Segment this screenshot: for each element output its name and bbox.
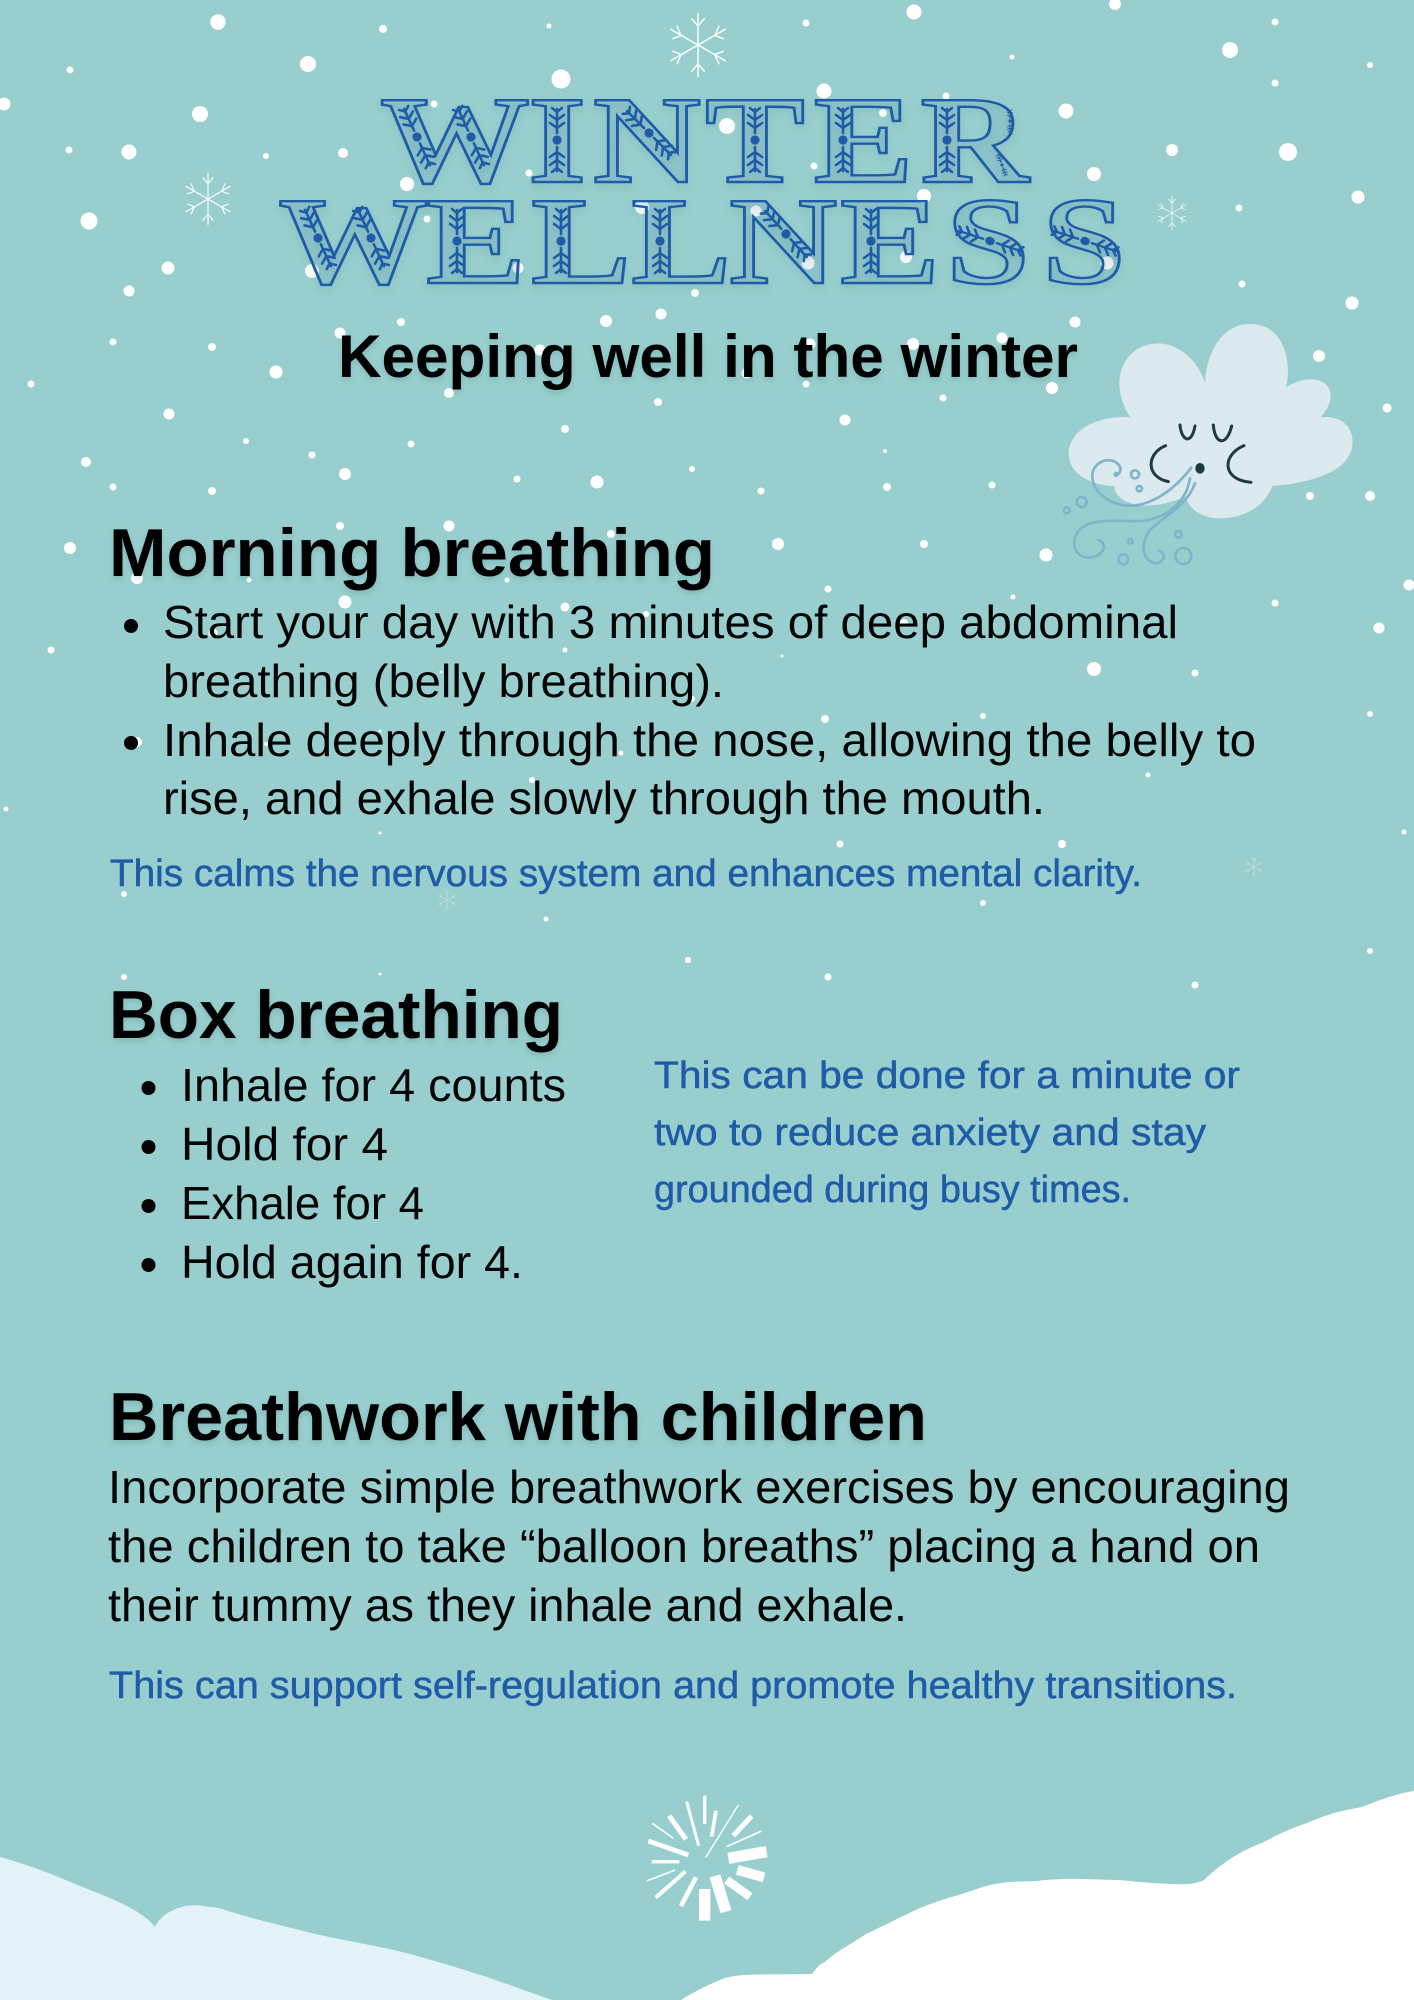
icon: small snowflake middle <box>438 890 456 910</box>
bullet list: morning breathing: breathing (belly breathing). <box>163 655 724 707</box>
bullet list: box breathing: Hold again for 4. <box>181 1236 523 1288</box>
bullet list: morning breathing <box>124 596 1256 824</box>
bullet list: box breathing <box>142 1059 566 1288</box>
note: morning breathing: This calms the nervous system and enhances mental clarity. <box>110 853 1142 895</box>
title: winter wellness: WINTER <box>380 71 1030 209</box>
panel: breathwork with children <box>108 1379 1290 1707</box>
note: breathwork: This can support self-regulation and promote healthy transitions. <box>109 1665 1237 1707</box>
bullet list: box breathing: Exhale for 4 <box>181 1177 424 1229</box>
bullet list: box breathing: Inhale for 4 counts <box>181 1059 566 1111</box>
title: winter wellness: WELLNESS <box>278 172 1126 310</box>
paragraph: breathwork: their tummy as they inhale and exhale. <box>108 1579 907 1631</box>
subtitle: Keeping well in the winter <box>338 323 1078 390</box>
icon: snowflake left <box>186 174 230 224</box>
note: box breathing: This can be done for a minute or <box>654 1055 1240 1097</box>
bullet list: morning breathing: Start your day with 3 minutes of deep abdominal <box>163 596 1178 648</box>
heading: morning breathing: Morning breathing <box>109 515 715 591</box>
panel: box breathing <box>109 977 1240 1288</box>
icon: blowing cloud <box>1064 324 1353 564</box>
note: box breathing: two to reduce anxiety and stay <box>654 1112 1206 1154</box>
bullet list: morning breathing: rise, and exhale slowly through the mouth. <box>163 772 1045 824</box>
paragraph: breathwork <box>108 1461 1290 1631</box>
icon: sunburst logo <box>647 1796 767 1921</box>
heading: box breathing: Box breathing <box>109 977 563 1053</box>
snow drift left <box>0 1857 552 2000</box>
snowfall dots <box>0 0 1414 988</box>
icon: small snowflake right <box>1245 857 1263 877</box>
title: winter wellness <box>278 71 1126 310</box>
note: box breathing <box>654 1055 1240 1211</box>
panel: morning breathing <box>109 515 1256 895</box>
note: box breathing: grounded during busy times. <box>654 1169 1131 1211</box>
icon: snowflake right <box>1158 196 1186 230</box>
bullet list: box breathing: Hold for 4 <box>181 1118 388 1170</box>
snow drift right <box>681 1791 1414 2000</box>
icon: snowflake top <box>671 14 725 77</box>
bullet list: morning breathing: Inhale deeply through the nose, allowing the belly to <box>163 714 1256 766</box>
paragraph: breathwork: the children to take “balloon breaths” placing a hand on <box>108 1520 1260 1572</box>
heading: breathwork with children: Breathwork with children <box>109 1379 927 1455</box>
paragraph: breathwork: Incorporate simple breathwork exercises by encouraging <box>108 1461 1290 1513</box>
